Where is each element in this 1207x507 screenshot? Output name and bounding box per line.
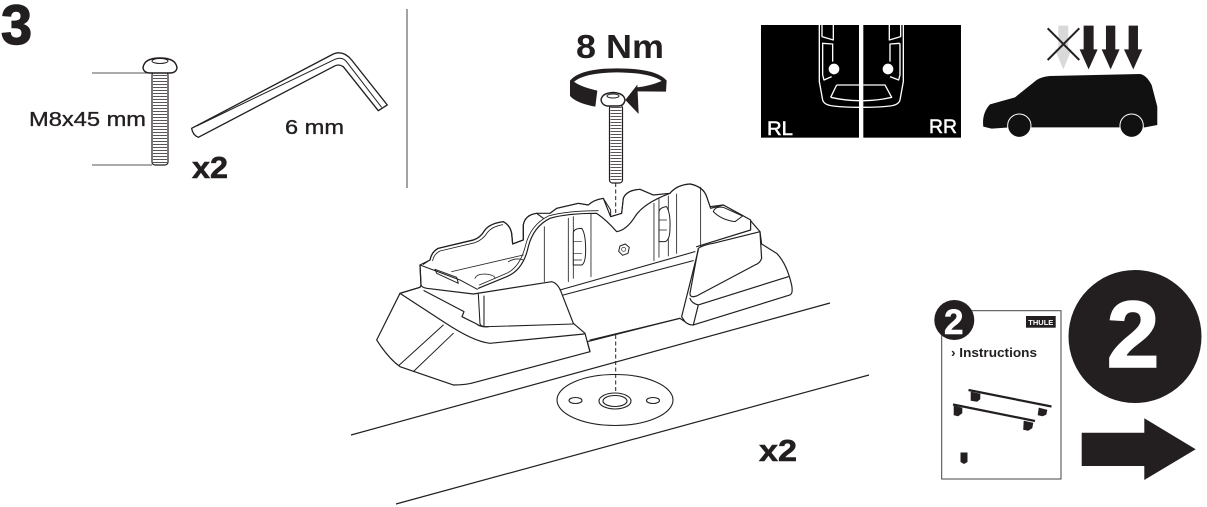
quantity label: x2	[192, 150, 228, 185]
front wall	[478, 184, 751, 288]
icon: car with even roof load	[983, 26, 1157, 137]
booklet title: › Instructions	[951, 345, 1037, 360]
rear right panel	[863, 25, 961, 138]
roof lines	[351, 303, 869, 504]
badge number: 2	[944, 303, 963, 342]
tray floor	[452, 255, 523, 278]
hex bolt on the wall	[619, 244, 629, 255]
torque label: 8 Nm	[576, 28, 664, 65]
divider	[406, 9, 408, 188]
booklet page	[942, 311, 1061, 479]
icon: bolt with dimension lines	[92, 58, 177, 165]
next step number: 2	[1107, 282, 1159, 388]
alignment dashed line	[615, 183, 617, 400]
foot body silhouette	[377, 184, 792, 385]
tray rim	[420, 260, 477, 289]
right end cap	[690, 232, 762, 297]
load arrows	[1080, 26, 1142, 69]
arrow: next step	[1082, 418, 1196, 480]
icon: rotation arrow	[570, 68, 667, 114]
RR label: RR	[929, 117, 957, 138]
brand logo	[1026, 316, 1056, 328]
next step badge	[1068, 270, 1202, 403]
brand name: THULE	[1028, 318, 1053, 327]
bolt size label: M8x45 mm	[29, 108, 146, 131]
left end cap	[478, 294, 573, 327]
icon: roof mounting disc	[557, 374, 673, 426]
panel: required tools	[29, 53, 387, 185]
icon: roof bars	[953, 390, 1052, 430]
RL label: RL	[767, 119, 793, 140]
icon: torque bolt	[601, 92, 625, 183]
icon: hex key	[192, 53, 387, 137]
booklet step badge	[934, 300, 974, 340]
faded arrow	[1055, 26, 1072, 69]
panel: instruction booklet	[934, 300, 1061, 479]
mounting point markers	[829, 64, 839, 74]
car outline from above	[819, 25, 903, 107]
quantity label: x2	[759, 433, 797, 468]
illustration: mounting foot	[377, 184, 792, 385]
back wall	[550, 189, 653, 217]
icon: small part	[960, 452, 968, 464]
slots and walls	[544, 214, 591, 282]
middle channel	[560, 252, 695, 340]
rear left panel	[761, 25, 859, 138]
car silhouette	[983, 74, 1157, 129]
panel: rear left and rear right positions	[761, 25, 961, 138]
cross mark	[1048, 28, 1079, 60]
right clip detail	[713, 207, 743, 222]
hex key size label: 6 mm	[285, 116, 344, 139]
